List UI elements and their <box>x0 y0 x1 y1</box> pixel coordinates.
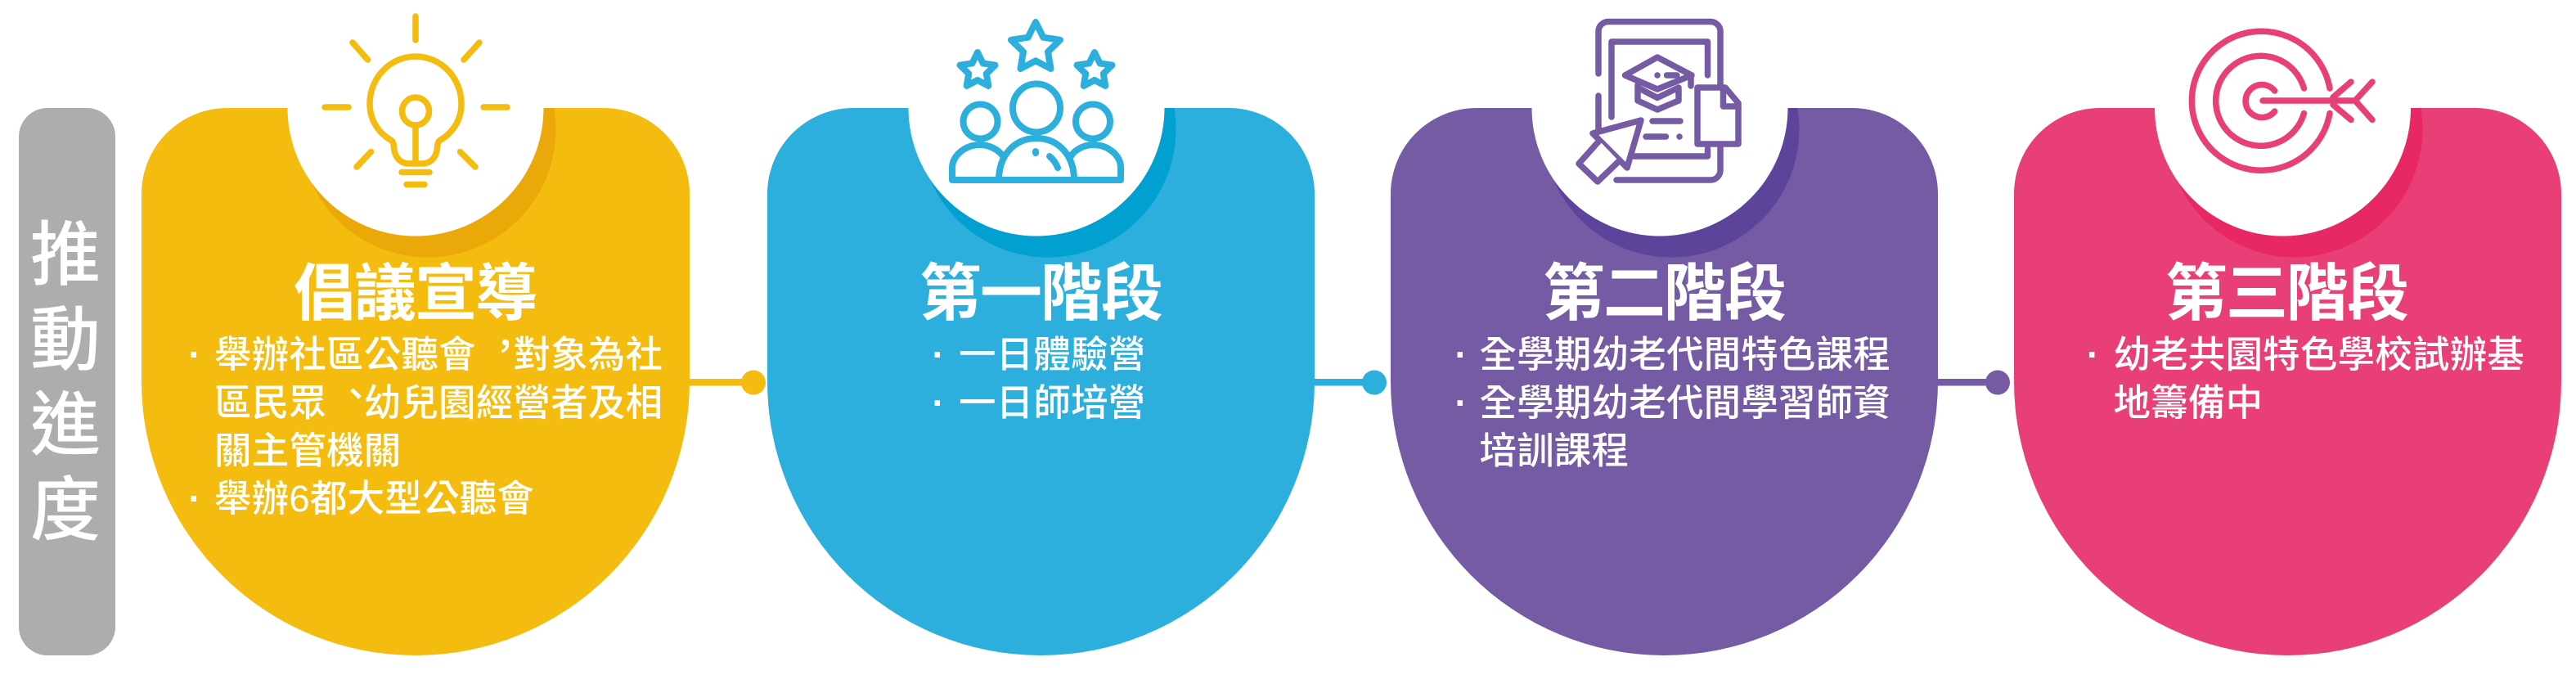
bullet list: advocacy items: 對象為社 <box>514 334 663 376</box>
panel: 第三階段 <box>2014 0 2561 655</box>
bullet list: advocacy items: · <box>188 334 201 376</box>
connector: stage one to stage two <box>1312 370 1387 394</box>
bullet list: stage three items <box>2087 334 2524 424</box>
bullet list: stage one items <box>933 334 1145 424</box>
heading: 倡議宣導: 倡議宣導 <box>294 259 537 329</box>
bullet list: advocacy items: 舉辦6都大型公聽會 <box>214 478 534 520</box>
side label panel: 推動進度: 度 <box>30 471 101 550</box>
side label panel: 推動進度: 動 <box>30 301 101 380</box>
heading: 第三階段: 第三階段 <box>2165 259 2408 329</box>
icon: light bulb <box>325 16 507 185</box>
connector: advocacy to stage one <box>687 370 766 394</box>
bullet list: advocacy items: · <box>188 478 201 520</box>
connector: stage two to stage three <box>1935 370 2010 394</box>
bullet list: advocacy items: 關主管機關 <box>214 430 401 471</box>
side label panel: 推動進度: 推 <box>30 216 101 295</box>
heading: 第一階段: 第一階段 <box>919 259 1162 329</box>
panel: 倡議宣導 <box>142 0 690 655</box>
bullet list: stage one items: 一日師培營 <box>959 382 1145 424</box>
bullet list: stage two items: · <box>1454 382 1468 424</box>
bullet list: advocacy items: 幼兒園經營者及相 <box>364 382 663 424</box>
bullet list: stage one items: · <box>933 334 944 376</box>
icon: target and arrow <box>2192 31 2372 170</box>
bullet list: stage two items: · <box>1454 334 1468 376</box>
icon: tablet, graduation cap, document and cursor <box>1579 21 1738 182</box>
side label panel: 推動進度: 進 <box>30 386 101 465</box>
bullet list: stage two items <box>1454 334 1890 471</box>
bullet list: advocacy items: 、 <box>337 374 375 416</box>
bullet list: stage two items: 培訓課程 <box>1479 430 1629 471</box>
bullet list: stage one items: 一日體驗營 <box>959 334 1145 376</box>
bullet list: stage two items: 全學期幼老代間特色課程 <box>1479 334 1890 376</box>
bullet list: stage two items: 全學期幼老代間學習師資 <box>1479 382 1890 424</box>
bullet list: stage three items: · <box>2087 334 2099 376</box>
bullet list: advocacy items: ， <box>487 326 524 367</box>
icon: people and stars <box>952 22 1121 180</box>
panel: 第二階段 <box>1391 0 1938 655</box>
side label panel: 推動進度 <box>19 108 115 655</box>
heading: 第二階段: 第二階段 <box>1543 259 1786 329</box>
panel: 第一階段 <box>767 0 1315 655</box>
bullet list: stage one items: · <box>933 382 944 424</box>
bullet list: stage three items: 幼老共園特色學校試辦基 <box>2114 334 2524 376</box>
bullet list: advocacy items: 區民眾 <box>214 382 326 424</box>
bullet list: advocacy items: 舉辦社區公聽會 <box>214 334 476 376</box>
bullet list: stage three items: 地籌備中 <box>2114 382 2263 424</box>
bullet list: advocacy items <box>188 326 663 520</box>
